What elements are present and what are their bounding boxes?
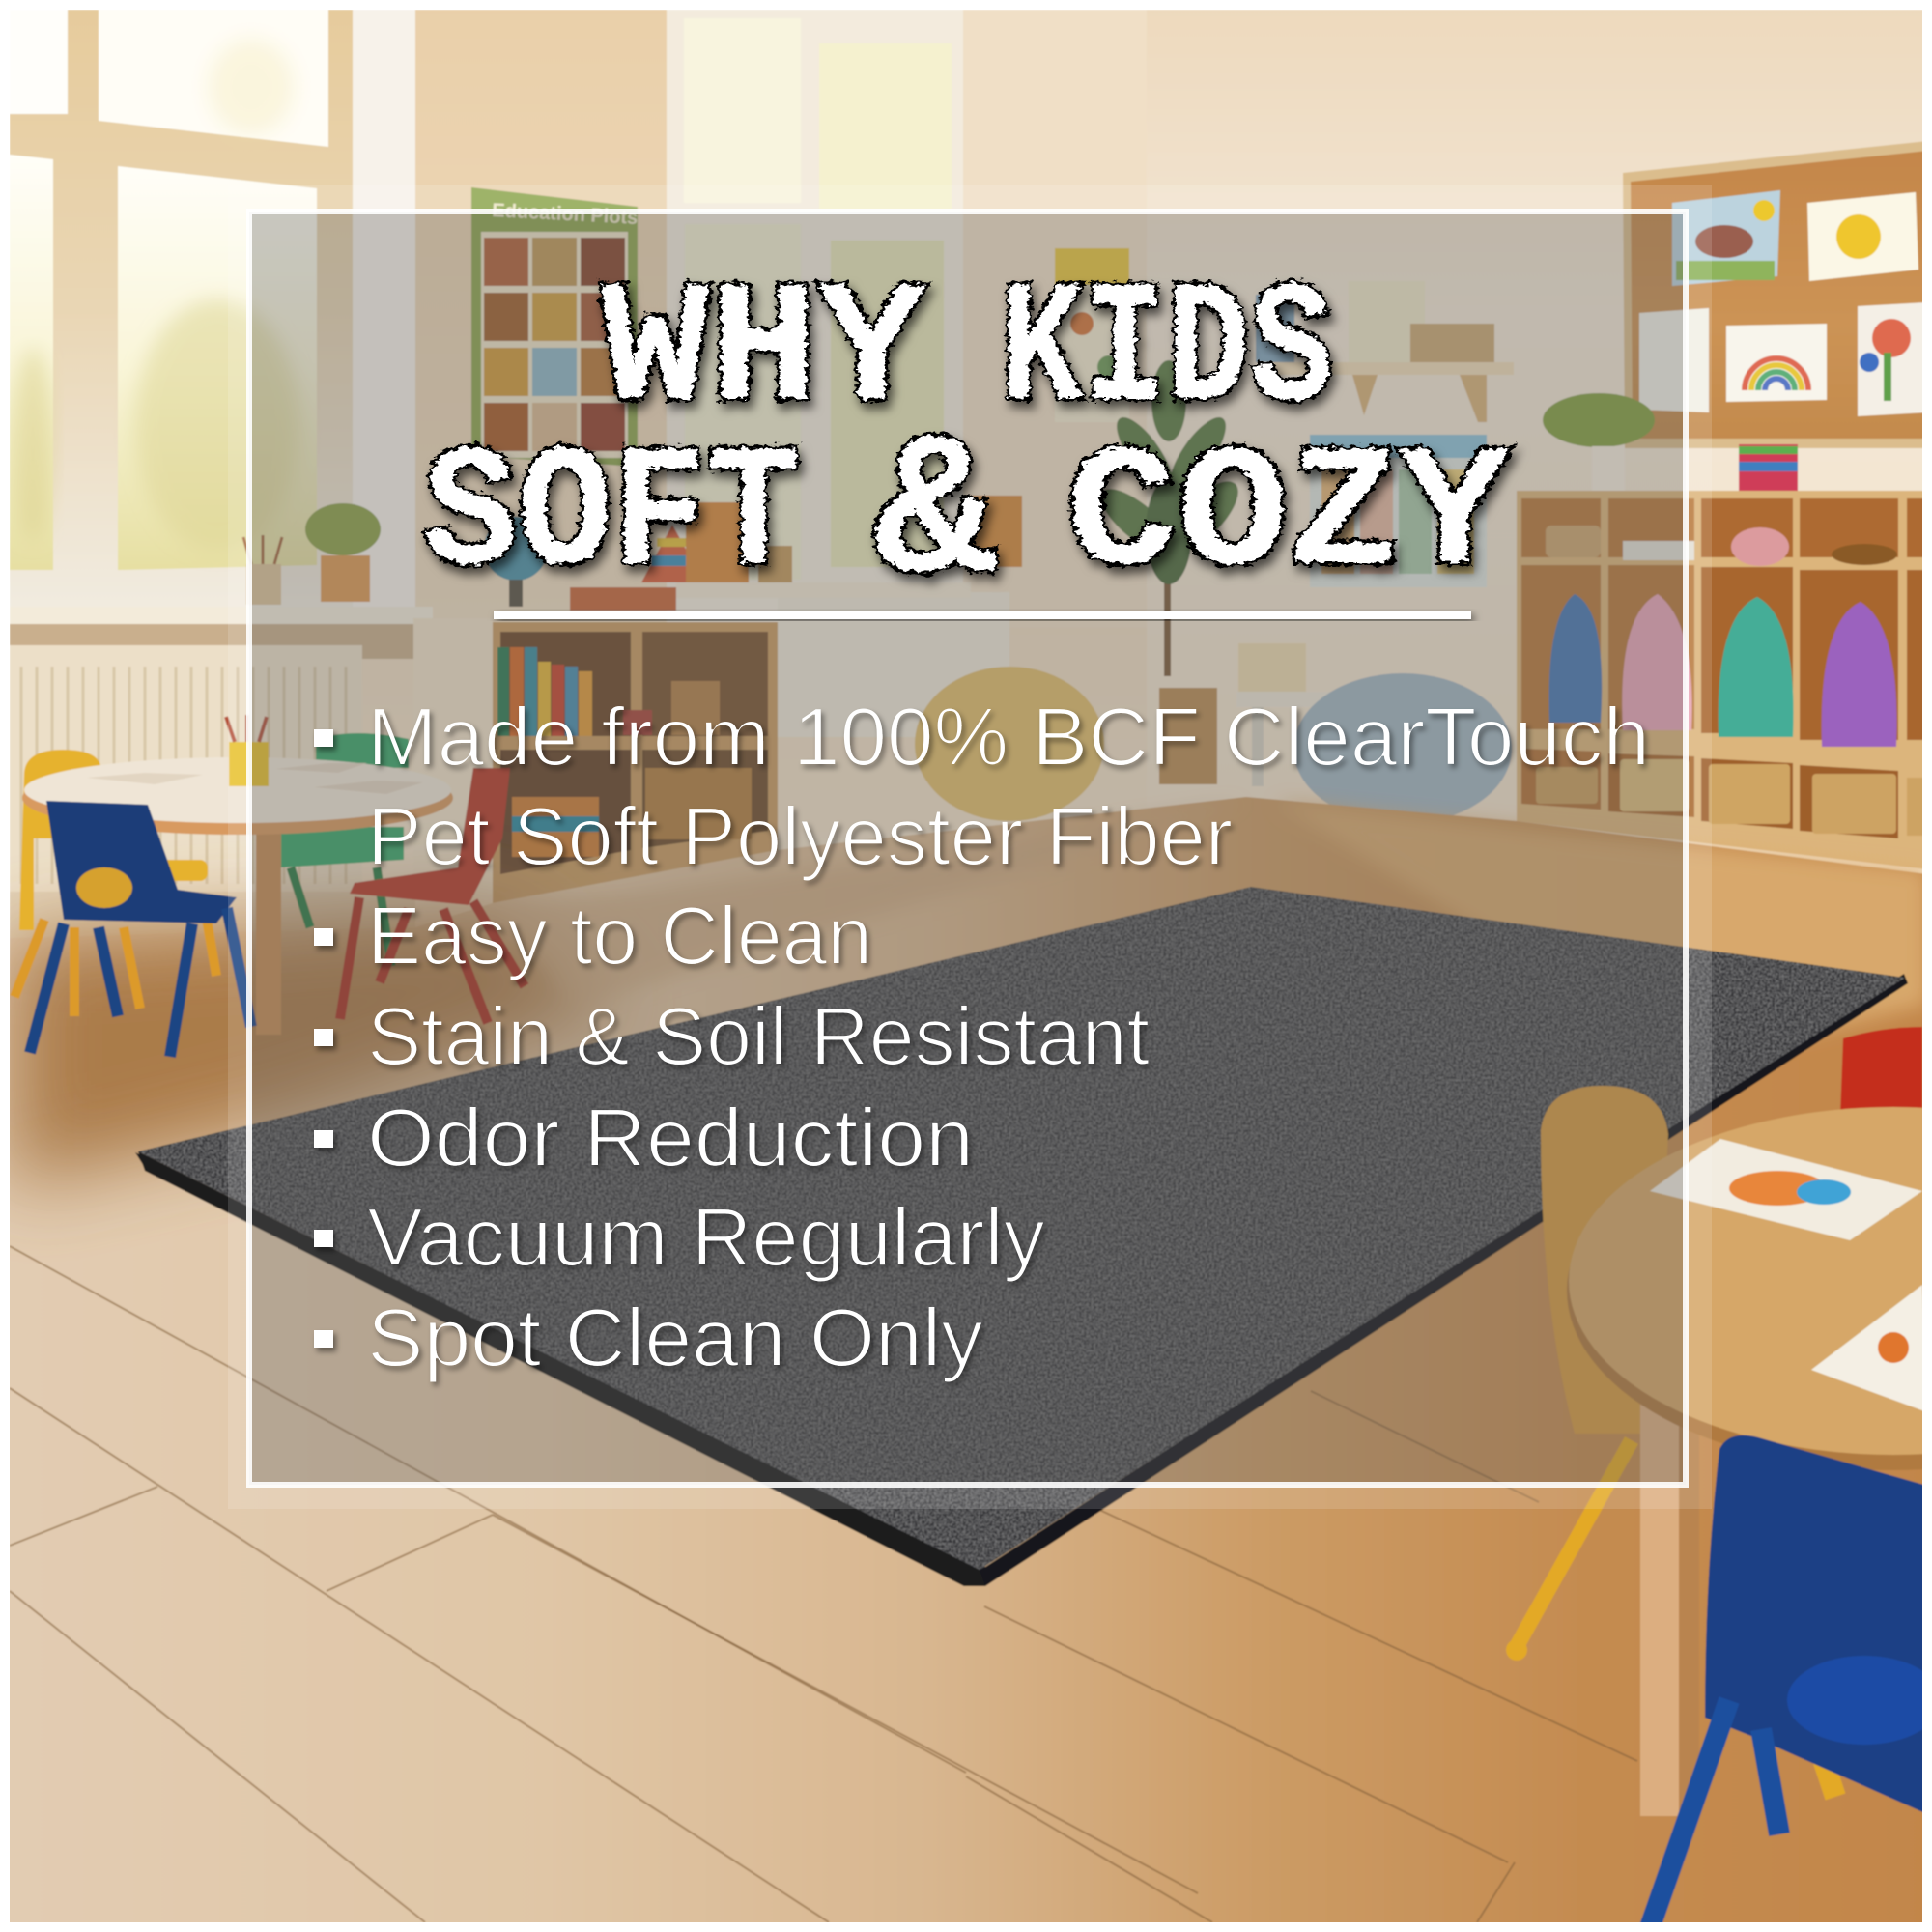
feature list	[313, 692, 1650, 1384]
title word: SOFT: SOFT	[423, 420, 801, 614]
feature: easy to clean: Easy to Clean	[367, 891, 872, 982]
baskets	[1536, 759, 1927, 836]
floor plank joints	[10, 1246, 1637, 1922]
feature: vacuum regularly: Vacuum Regularly	[367, 1192, 1045, 1284]
title underline	[494, 611, 1471, 619]
green chair	[281, 733, 409, 966]
bullet 3	[313, 1028, 334, 1047]
blue chair	[30, 801, 251, 1057]
left window	[10, 10, 433, 659]
translucent overlay panel	[228, 185, 1712, 1509]
small wall poster	[1055, 247, 1130, 377]
left sill plant and pencil cup	[243, 503, 381, 605]
feature: spot clean only: Spot Clean Only	[367, 1293, 984, 1384]
table leg	[256, 821, 281, 1035]
title symbol: ampersand: &	[874, 402, 996, 632]
back wall	[361, 10, 1148, 927]
pencil cup	[226, 715, 269, 786]
yellow chair	[14, 750, 216, 1016]
cubby shelves	[1517, 491, 1927, 869]
title word: KIDS: KIDS	[1000, 256, 1333, 450]
foreground red chair back	[1840, 1027, 1922, 1116]
left radiator	[10, 645, 362, 892]
foreground orange chair	[1506, 1086, 1668, 1661]
yellow far legs	[1816, 1739, 1835, 1797]
feature: stain and soil resistant: Stain & Soil Resistant	[367, 991, 1150, 1083]
alphabet chart	[1310, 435, 1487, 587]
window sill toys	[484, 496, 1022, 611]
education poster	[471, 187, 639, 467]
bullet 1	[313, 728, 334, 748]
low bookshelf	[493, 622, 778, 903]
centre radiator	[778, 592, 1009, 737]
bullet 4	[313, 1129, 334, 1149]
title	[423, 256, 1510, 632]
foreground blue chair	[1650, 1435, 1932, 1927]
floor tonal patches	[10, 802, 1927, 1188]
feature: fiber, line 1: Made from 100% BCF ClearTouch	[367, 692, 1650, 783]
left classroom table with chairs	[14, 715, 525, 1057]
wall below radiator	[10, 892, 415, 938]
floor	[5, 797, 1927, 1927]
plant and colour toy on cubby	[1543, 393, 1798, 491]
notebooks on table	[87, 763, 423, 794]
red chair	[340, 768, 525, 1023]
bullet 5	[313, 1229, 334, 1248]
left wall pier	[353, 10, 415, 628]
bean bags and stool	[915, 643, 1512, 824]
right wall	[1147, 10, 1929, 879]
wall shelf	[1256, 281, 1514, 422]
title word: COZY: COZY	[1066, 420, 1510, 614]
bullet 2	[313, 927, 334, 947]
table top	[22, 761, 453, 835]
rug	[135, 887, 1908, 1586]
tall plant	[1103, 359, 1238, 677]
bullet 6	[313, 1329, 334, 1349]
first row items	[1546, 526, 1897, 566]
feature: fiber, line 2: Pet Soft Polyester Fiber	[367, 791, 1233, 883]
backpacks	[1549, 594, 1897, 747]
poster heading: Education Plots	[492, 200, 639, 229]
feature: odor reduction: Odor Reduction	[367, 1093, 974, 1184]
foreground table	[1567, 1107, 1932, 1816]
second book on table	[1811, 1285, 1927, 1412]
centre window	[667, 10, 1147, 628]
cream cabinet	[413, 618, 493, 898]
book on table	[1650, 1139, 1922, 1240]
corkboard	[1623, 141, 1927, 448]
title word: WHY: WHY	[601, 256, 926, 450]
